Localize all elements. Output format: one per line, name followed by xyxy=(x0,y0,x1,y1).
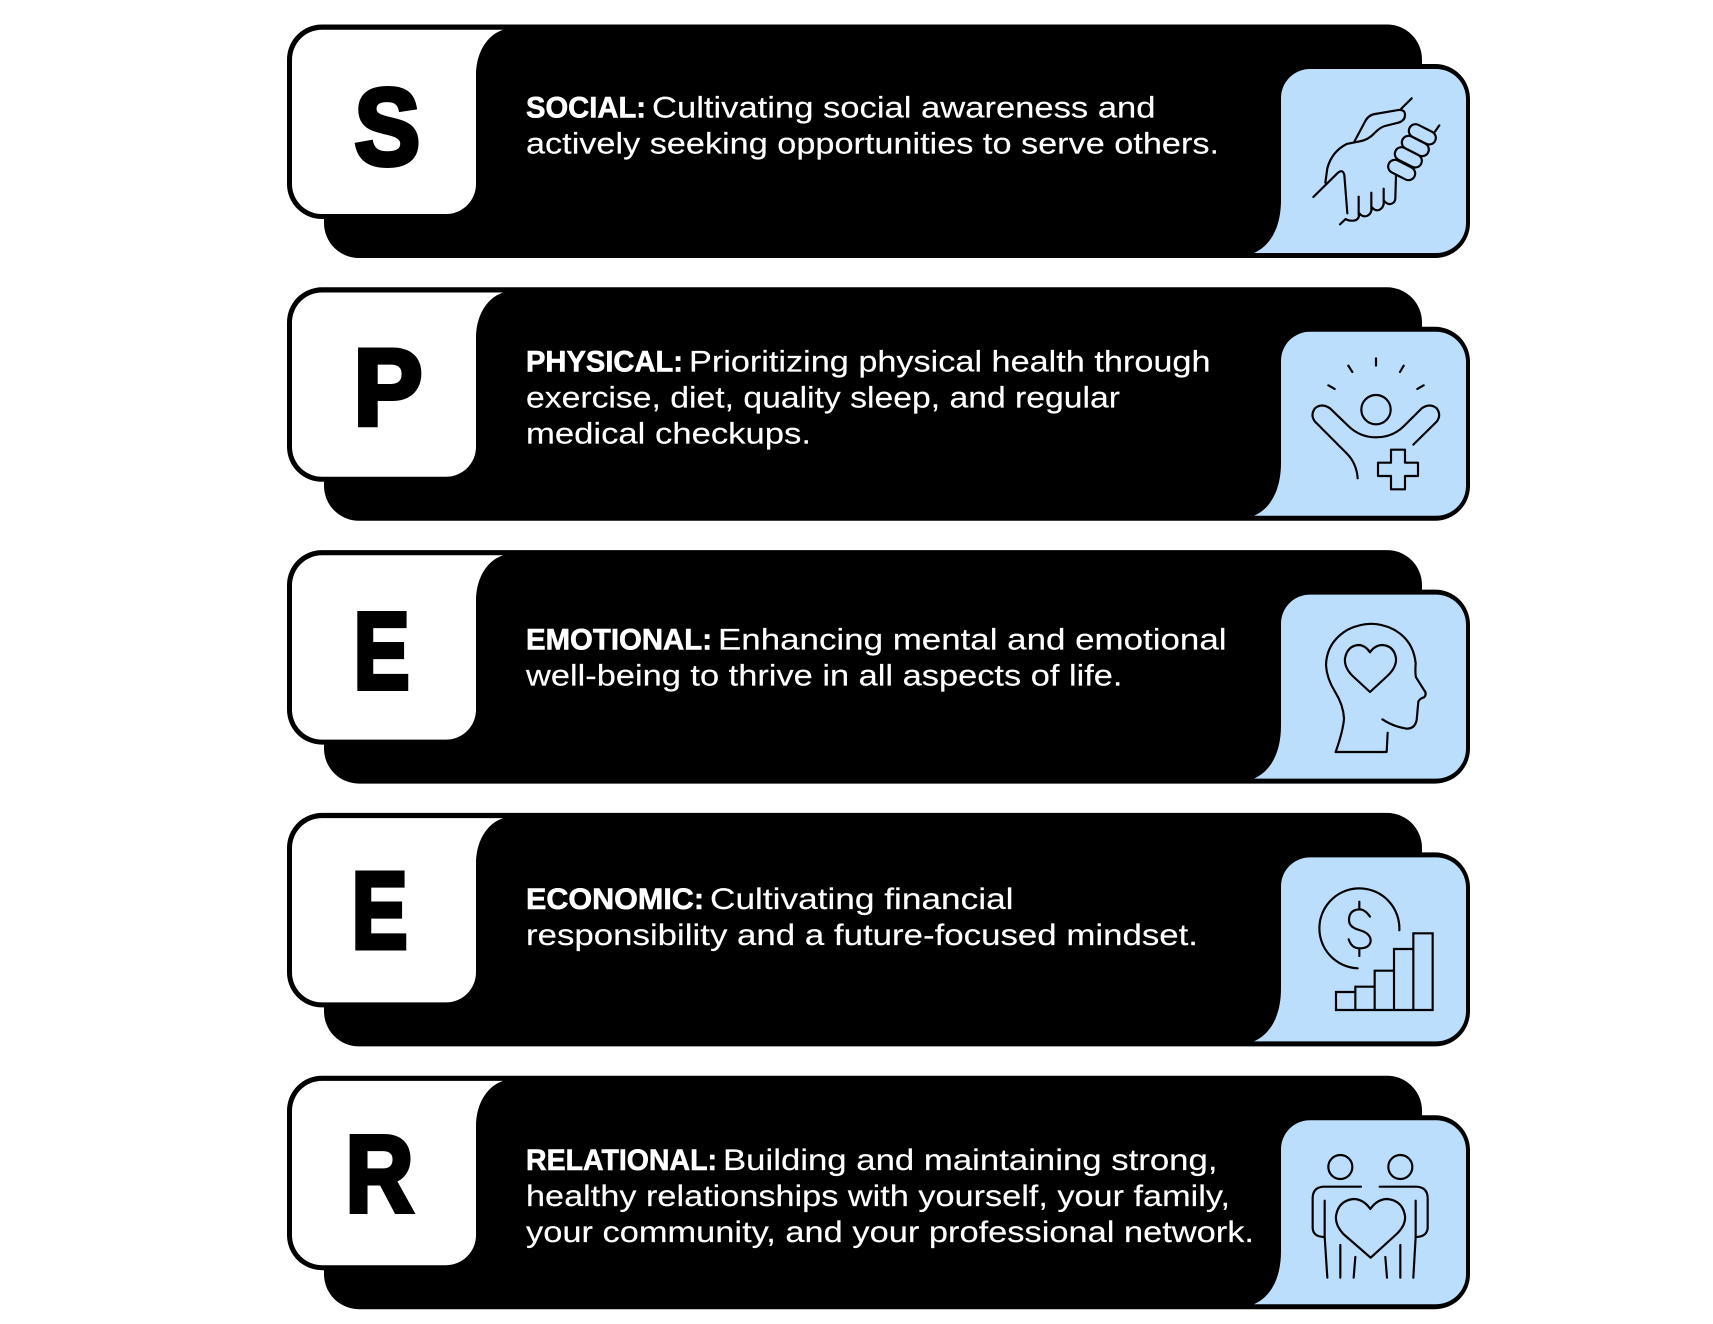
panel: physical xyxy=(287,287,1470,521)
icon: dollar and growth bars xyxy=(1319,888,1433,1010)
text: relational xyxy=(526,1144,1254,1249)
text: social: SOCIAL: xyxy=(526,92,646,125)
icon: two people with heart xyxy=(1313,1155,1428,1278)
text: economic: Cultivating financial xyxy=(710,883,1014,916)
text: relational: RELATIONAL: xyxy=(526,1144,717,1177)
black card xyxy=(287,24,1470,258)
text: physical: medical checkups. xyxy=(526,418,811,451)
black card xyxy=(287,287,1470,521)
text: emotional xyxy=(525,624,1226,693)
text: emotional: EMOTIONAL: xyxy=(526,624,712,657)
panel: relational xyxy=(287,1076,1470,1309)
letter S: S xyxy=(354,66,420,188)
panel: social xyxy=(287,24,1470,258)
icon: head with heart xyxy=(1326,624,1426,752)
text: relational: healthy relationships with yourself, your family, xyxy=(526,1180,1230,1213)
icon tile: social xyxy=(1254,69,1466,253)
text: relational: Building and maintaining strong, xyxy=(723,1144,1218,1177)
text: physical xyxy=(526,346,1210,451)
letter P: P xyxy=(354,327,422,449)
letter tile: S xyxy=(292,30,503,214)
text: social xyxy=(526,92,1219,161)
text: social: Cultivating social awareness and xyxy=(652,92,1156,125)
black card xyxy=(287,813,1470,1046)
icon tile: emotional xyxy=(1254,595,1466,779)
panel: emotional xyxy=(287,550,1470,784)
letter tile: R xyxy=(292,1081,503,1265)
text: physical: Prioritizing physical health through xyxy=(689,346,1210,379)
letter R: R xyxy=(346,1114,414,1236)
text: economic: responsibility and a future-focused mindset. xyxy=(526,919,1198,952)
icon tile: physical xyxy=(1254,332,1466,516)
letter tile: E xyxy=(292,818,503,1002)
text: emotional: well-being to thrive in all aspects of life. xyxy=(525,660,1122,693)
text: emotional: Enhancing mental and emotional xyxy=(718,624,1226,657)
black card xyxy=(287,550,1470,784)
text: economic xyxy=(526,883,1198,952)
letter tile: P xyxy=(292,292,503,477)
black card xyxy=(287,1076,1470,1309)
panel: economic xyxy=(287,813,1470,1046)
letter tile: E xyxy=(292,555,503,740)
text: relational: your community, and your professional network. xyxy=(526,1216,1254,1249)
letter E: E xyxy=(352,850,408,972)
text: physical: PHYSICAL: xyxy=(526,346,683,379)
icon: person with health cross xyxy=(1312,358,1439,489)
text: physical: exercise, diet, quality sleep, and regular xyxy=(526,382,1120,415)
icon tile: economic xyxy=(1254,857,1466,1041)
letter E: E xyxy=(354,591,410,713)
icon: handshake xyxy=(1313,98,1439,224)
text: social: actively seeking opportunities to serve others. xyxy=(526,128,1219,161)
text: economic: ECONOMIC: xyxy=(526,883,704,916)
icon tile: relational xyxy=(1254,1120,1466,1304)
